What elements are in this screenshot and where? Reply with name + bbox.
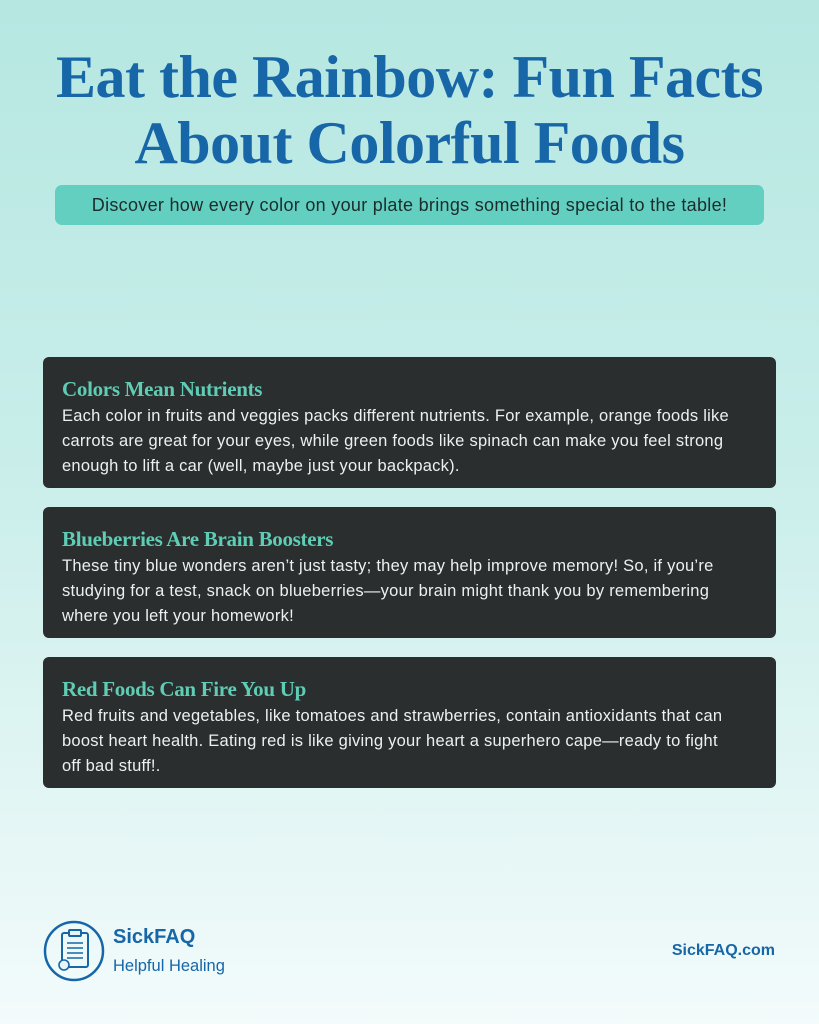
body text bbox=[62, 707, 722, 775]
panel: blueberries bbox=[43, 507, 776, 638]
body text: boost heart health. Eating red is like giving your heart a superhero cape—ready to fight bbox=[62, 732, 718, 750]
body text: where you left your homework! bbox=[62, 607, 294, 625]
title: About Colorful Foods bbox=[134, 110, 685, 176]
body text: studying for a test, snack on blueberries—your brain might thank you by remembering bbox=[62, 582, 709, 600]
panel: red foods bbox=[43, 657, 776, 788]
title bbox=[56, 44, 763, 176]
heading: Red Foods Can Fire You Up bbox=[62, 677, 306, 701]
tagline: Helpful Healing bbox=[113, 957, 225, 975]
body text bbox=[62, 557, 714, 625]
icon: clipboard bbox=[44, 920, 104, 982]
body text: enough to lift a car (well, maybe just your backpack). bbox=[62, 457, 460, 475]
body text: off bad stuff!. bbox=[62, 757, 161, 775]
body text: Each color in fruits and veggies packs different nutrients. For example, orange foods like bbox=[62, 407, 729, 425]
body text bbox=[62, 407, 729, 475]
brand name: SickFAQ bbox=[113, 926, 195, 948]
heading: Blueberries Are Brain Boosters bbox=[62, 527, 333, 551]
logo bbox=[44, 920, 225, 982]
panel: colors mean nutrients bbox=[43, 357, 776, 488]
title: Eat the Rainbow: Fun Facts bbox=[56, 44, 763, 110]
body text: carrots are great for your eyes, while green foods like spinach can make you feel strong bbox=[62, 432, 723, 450]
heading: Colors Mean Nutrients bbox=[62, 377, 262, 401]
website url: SickFAQ.com bbox=[672, 942, 775, 959]
subtitle pill: Discover how every color on your plate brings something special to the table! bbox=[92, 195, 727, 215]
body text: Red fruits and vegetables, like tomatoes and strawberries, contain antioxidants that can bbox=[62, 707, 722, 725]
subtitle pill bbox=[55, 185, 764, 225]
body text: These tiny blue wonders aren’t just tasty; they may help improve memory! So, if you’re bbox=[62, 557, 714, 575]
